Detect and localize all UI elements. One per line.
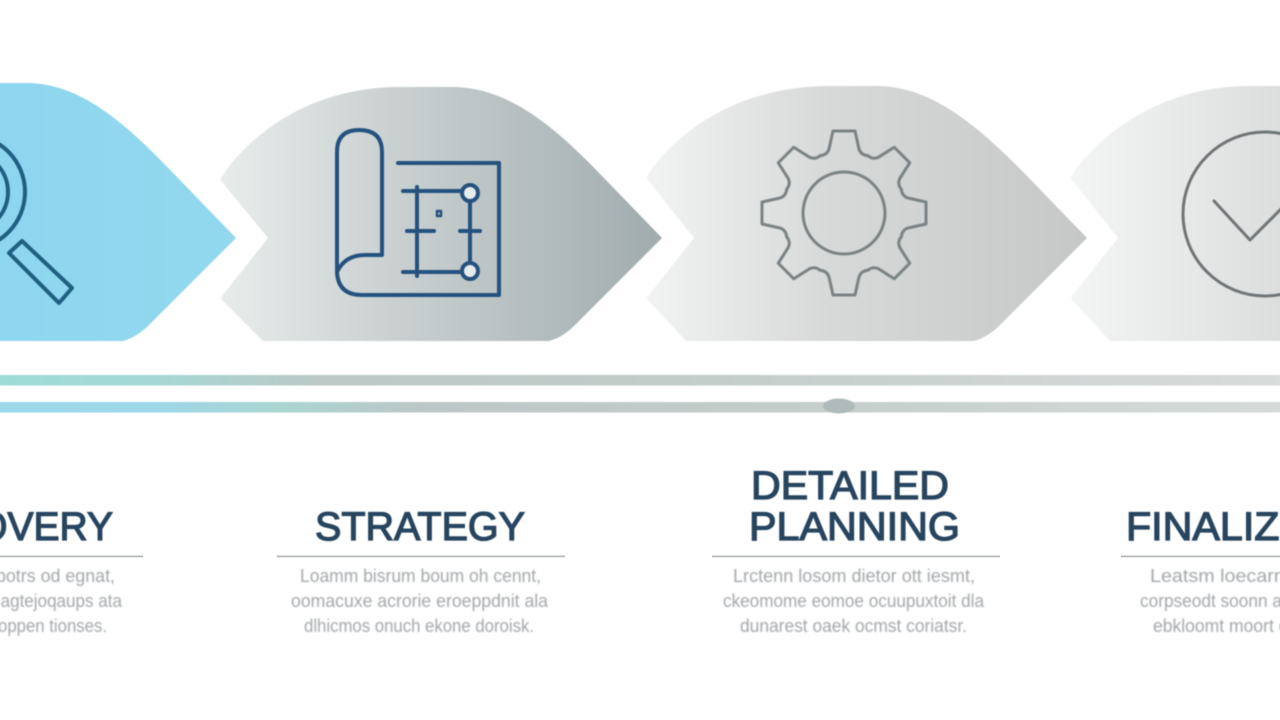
description: detailed planning: ckeomome eomoe ocuupuxtoit dla	[723, 591, 985, 611]
description: strategy: dlhicmos onuch ekone doroisk.	[304, 616, 534, 636]
description: finalize	[1140, 566, 1280, 636]
icon: check mark in circle	[1183, 132, 1280, 296]
timeline bars	[0, 375, 1280, 414]
description: discovery	[0, 566, 123, 636]
description: detailed planning	[723, 566, 985, 636]
icon: magnifying glass	[0, 135, 72, 303]
heading: strategy: STRATEGY	[315, 505, 525, 549]
panel: detailed planning arrow shape	[647, 86, 1087, 341]
description: strategy	[291, 566, 549, 636]
step: discovery	[0, 505, 143, 636]
heading: detailed planning: PLANNING	[749, 505, 960, 549]
description: detailed planning: dunarest oaek ocmst coriatsr.	[740, 616, 967, 636]
panel: discovery arrow shape	[0, 83, 236, 341]
panel: finalize arrow shape	[1071, 86, 1280, 341]
step: strategy	[277, 505, 565, 636]
icon: gear	[762, 131, 926, 295]
heading: detailed planning	[749, 464, 960, 549]
description: strategy: Loamm bisrum boum oh cennt,	[300, 566, 541, 586]
description: detailed planning: Lrctenn losom dietor ott iesmt,	[733, 566, 975, 586]
step: finalize	[1121, 505, 1280, 636]
icon: blueprint	[337, 130, 499, 295]
heading: detailed planning: DETAILED	[751, 464, 949, 508]
panel: strategy arrow shape	[221, 87, 662, 341]
description: strategy: oomacuxe acrorie eroeppdnit ala	[291, 591, 549, 611]
timeline marker	[823, 398, 855, 414]
step: detailed planning	[712, 464, 1000, 636]
